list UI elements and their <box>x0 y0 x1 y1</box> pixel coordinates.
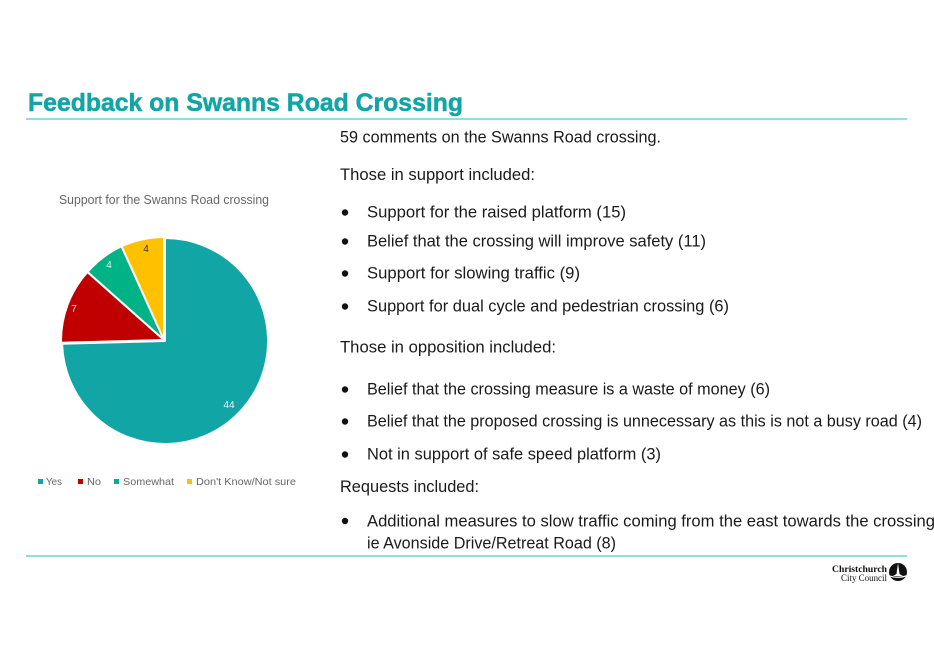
data labels: 4 <box>106 260 112 271</box>
list: requests: ie Avonside Drive/Retreat Road (8) <box>367 534 616 552</box>
list: support: Support for dual cycle and pedestrian crossing (6) <box>367 296 729 316</box>
list: opposition: Belief that the crossing measure is a waste of money (6) <box>367 380 770 398</box>
list: support: Belief that the crossing will improve safety (11) <box>367 232 706 250</box>
slice: yes 44 <box>62 238 268 444</box>
list: support <box>342 202 729 316</box>
pie chart <box>61 237 268 444</box>
list: opposition: Belief that the proposed crossing is unnecessary as this is not a busy road (4) <box>367 412 922 430</box>
legend: Don't Know/Not sure <box>196 476 296 488</box>
title: Feedback on Swanns Road Crossing <box>28 89 463 117</box>
logo: Christchurch City Council: Christchurch <box>832 565 888 575</box>
list: opposition: Not in support of safe speed platform (3) <box>367 444 661 464</box>
logo: Christchurch City Council <box>832 563 908 584</box>
panel: pie chart <box>38 193 296 488</box>
list: requests: Additional measures to slow traffic coming from the east towards the crossing <box>367 512 934 530</box>
legend: Somewhat <box>123 476 174 488</box>
heading: opposition: Those in opposition included: <box>340 338 556 356</box>
list: support: Support for slowing traffic (9) <box>367 264 580 282</box>
icon: cathedral emblem <box>888 563 908 581</box>
data labels: 4 <box>143 244 149 255</box>
list: opposition <box>342 380 922 464</box>
data labels: 7 <box>71 304 77 315</box>
text block: intro: 59 comments on the Swanns Road crossing. <box>340 128 661 146</box>
data labels: 44 <box>223 400 235 411</box>
list: requests <box>342 512 934 552</box>
list: support: Support for the raised platform (15) <box>367 202 626 222</box>
legend <box>38 476 296 488</box>
data labels <box>71 244 235 411</box>
legend: Yes <box>46 476 62 488</box>
slice: somewhat 4 <box>88 246 164 340</box>
slice: no 7 <box>61 272 164 343</box>
heading: support: Those in support included: <box>340 165 535 184</box>
logo: Christchurch City Council: City Council <box>841 574 887 584</box>
heading: requests: Requests included: <box>340 477 479 496</box>
legend: No <box>87 476 101 488</box>
chart title: Support for the Swanns Road crossing <box>59 193 269 207</box>
slice: don't know 4 <box>122 237 164 340</box>
